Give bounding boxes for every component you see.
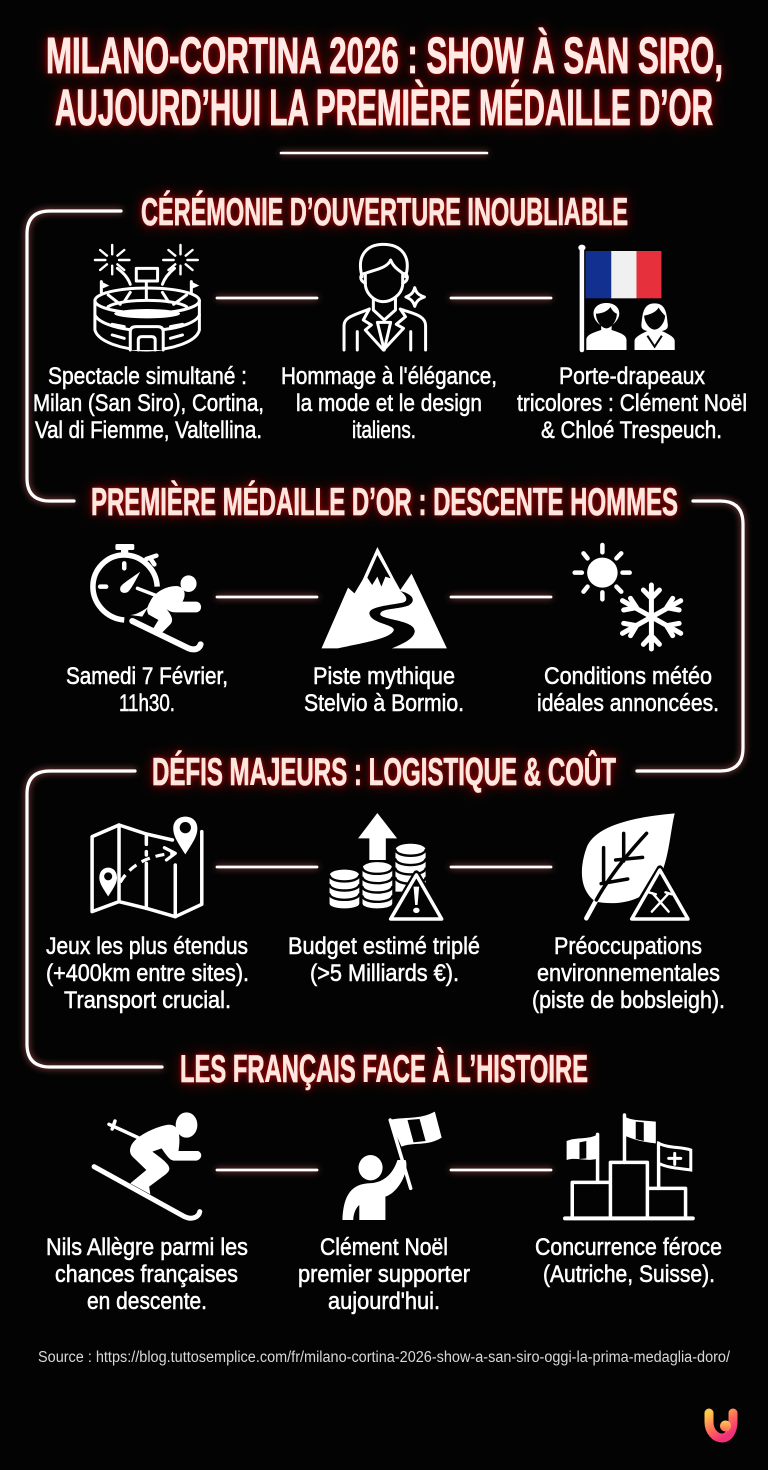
section 4: the French facing history (46, 1047, 722, 1315)
icon: stadium and fireworks (95, 245, 199, 350)
section 3: major challenges (46, 749, 725, 1014)
caption: weather: Conditions météo (544, 663, 712, 690)
connector (451, 596, 551, 598)
connector (217, 866, 317, 868)
icon: map with pins (92, 817, 202, 917)
caption: Clément Noël: aujourd'hui. (328, 1288, 440, 1315)
icon: rising budget coins (330, 813, 444, 920)
caption: tribute to Italian elegance: la mode et le design (296, 390, 482, 417)
caption: Stelvio piste (304, 663, 464, 717)
caption: Clément Noël: Clément Noël (320, 1234, 448, 1261)
connector (451, 866, 551, 868)
caption: tribute to Italian elegance: Hommage à l'élégance, (281, 363, 497, 390)
icon: supporter waving flag (342, 1112, 442, 1220)
caption: budget tripled: (>5 Milliards €). (310, 960, 459, 987)
connector (451, 297, 551, 299)
caption: weather (537, 663, 719, 717)
source line: Source : https://blog.tuttosemplice.com/fr/milano-cortina-2026-show-a-san-siro-oggi-la-prima-medaglia-doro/ (38, 1349, 731, 1366)
icon: mountain with ski run (322, 547, 447, 649)
icon: downhill skier (94, 1112, 201, 1218)
caption: most spread out games (46, 933, 249, 1014)
caption: Nils Allègre: en descente. (87, 1288, 207, 1315)
caption: simultaneous show (33, 363, 264, 444)
icon: sun and snowflake (575, 545, 681, 649)
icon: podium with flags (565, 1115, 693, 1218)
caption: fierce competition (535, 1234, 722, 1288)
caption: simultaneous show: Val di Fiemme, Valtellina. (35, 417, 262, 444)
caption: flag bearers: & Chloé Trespeuch. (541, 417, 722, 444)
caption: environmental concerns: (piste de bobsleigh). (532, 987, 725, 1014)
caption: tribute to Italian elegance (281, 363, 497, 444)
caption: most spread out games: Transport crucial. (64, 987, 231, 1014)
caption: Nils Allègre: Nils Allègre parmi les (46, 1234, 248, 1261)
section 1: ceremony (33, 190, 747, 444)
caption: Nils Allègre (46, 1234, 248, 1315)
connector path: section 2 to section 3 (637, 501, 743, 771)
connector (451, 1169, 551, 1171)
caption: flag bearers (517, 363, 747, 444)
caption: environmental concerns: Préoccupations (554, 933, 702, 960)
connector path: section 3 to section 4 (27, 771, 162, 1067)
icon: elegant woman (344, 244, 426, 350)
caption: weather: idéales annoncées. (537, 690, 719, 717)
caption: fierce competition: Concurrence féroce (535, 1234, 722, 1261)
caption: simultaneous show: Milan (San Siro), Cortina, (33, 390, 264, 417)
caption: Stelvio piste: Stelvio à Bormio. (304, 690, 464, 717)
connector (217, 1169, 317, 1171)
connector path: section 1 to section 2 (27, 211, 121, 501)
caption: Nils Allègre: chances françaises (55, 1261, 238, 1288)
caption: Clément Noël (298, 1234, 470, 1315)
connector (217, 297, 317, 299)
connector (217, 596, 317, 598)
section 2: first gold medal (66, 480, 719, 717)
caption: environmental concerns: environnementales (537, 960, 720, 987)
caption: date: 11h30. (119, 690, 175, 717)
logo (709, 1413, 733, 1438)
title underline (281, 152, 487, 154)
icon: French flag and flag bearers (578, 245, 675, 350)
icon: stopwatch and skier (93, 544, 201, 649)
caption: Stelvio piste: Piste mythique (313, 663, 455, 690)
caption: most spread out games: Jeux les plus étendus (46, 933, 248, 960)
title (46, 27, 723, 136)
caption: Clément Noël: premier supporter (298, 1261, 470, 1288)
icon: leaf with warning sign (582, 813, 691, 921)
caption: budget tripled (288, 933, 480, 987)
caption: budget tripled: Budget estimé triplé (288, 933, 480, 960)
caption: date (66, 663, 228, 717)
caption: tribute to Italian elegance: italiens. (352, 417, 416, 444)
caption: fierce competition: (Autriche, Suisse). (543, 1261, 715, 1288)
caption: environmental concerns (532, 933, 725, 1014)
caption: date: Samedi 7 Février, (66, 663, 228, 690)
caption: most spread out games: (+400km entre sites). (46, 960, 249, 987)
caption: flag bearers: Porte-drapeaux (559, 363, 705, 390)
caption: simultaneous show: Spectacle simultané : (48, 363, 247, 390)
